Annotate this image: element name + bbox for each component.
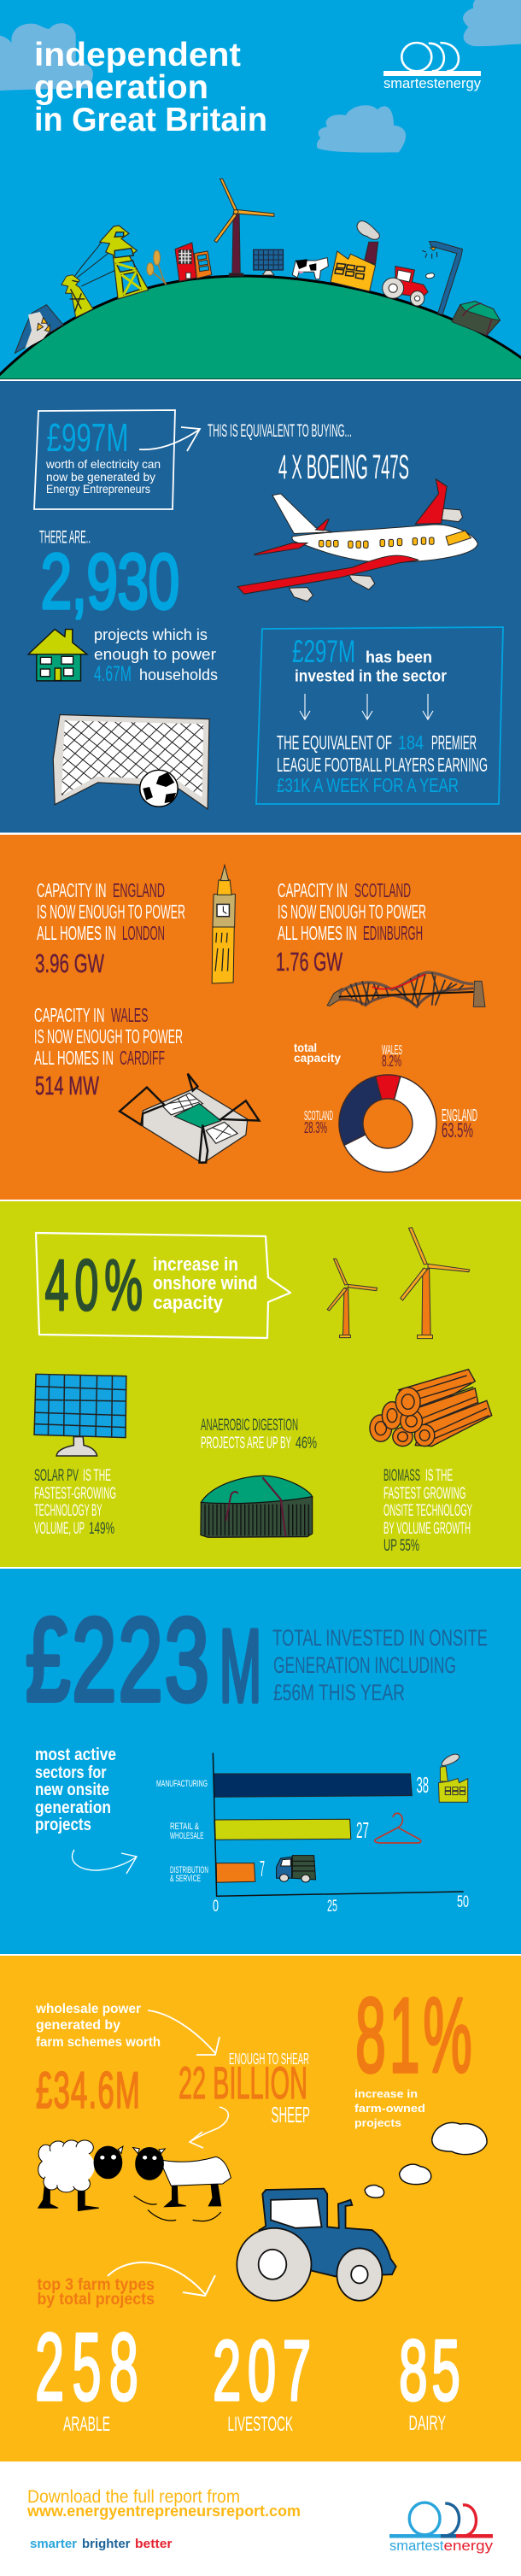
text: solar PV: TECHNOLOGY BY [34,1502,102,1520]
text: England capacity: 3.96 GW [35,948,104,978]
logo: smartestenergy colour [389,2503,494,2554]
stat: arable: ARABLE [63,2413,110,2436]
text: increase farm-owned [354,2087,425,2129]
logo: smartestenergy colour: energy [444,2538,494,2554]
icon: Forth bridge [327,972,485,1006]
text: Scotland capacity: 1.76 GW [276,947,342,977]
text: Scotland capacity: SCOTLAND [354,879,411,901]
donut chart: total capacity: 63.5% [442,1119,473,1142]
icon: coat hanger [375,1813,421,1843]
bar chart: sectors: 7 [260,1856,265,1881]
callout: £997M [34,410,175,509]
callout: £997M: £997M [46,415,128,460]
text: increase farm-owned: increase in [354,2087,418,2100]
icon: street lamp [422,242,462,314]
arrow [190,2107,228,2148]
icon: factory [331,221,379,291]
text: most active sectors: new onsite [35,1781,109,1799]
callout: 40% onshore wind [36,1233,290,1338]
text: Wales capacity: 514 MW [35,1071,99,1100]
donut chart: total capacity: total [294,1041,317,1054]
icon: hydro dam [15,305,63,353]
illustrations on the hill [15,179,500,353]
text: projects: households [139,666,218,684]
callout: £297M: £297M [292,634,355,669]
text: biomass [383,1467,472,1555]
icon: Big Ben [212,866,235,983]
text: solar PV: 149% [89,1520,114,1538]
text: projects: enough to power [94,646,216,663]
panel: Energy Entrepreneurs numbers: THERE ARE.. [39,528,91,547]
icon: wind turbine [214,179,274,276]
panel: technologies [0,1200,521,1568]
bar chart: sectors: RETAIL & [170,1822,199,1832]
text: wholesale power: wholesale power [35,2002,141,2016]
text: wholesale power: farm schemes worth [36,2035,161,2050]
text: biomass: IS THE [425,1467,453,1485]
icon: digester [452,302,500,336]
callout: £297M: 184 [398,731,424,754]
text: most active sectors: most active [35,1746,116,1764]
title: in Great Britain [34,102,267,138]
text: Wales capacity: CAPACITY IN [34,1004,104,1026]
text: Scotland capacity: CAPACITY IN [278,879,348,901]
callout: £997M: now be generated by [46,470,155,484]
text: England capacity: ENGLAND [113,879,165,901]
text: solar PV [34,1467,116,1538]
text: Wales capacity: ALL HOMES IN [34,1047,114,1069]
callout: £297M: PREMIER [431,731,477,754]
bar chart: sectors: DISTRIBUTION [170,1865,208,1875]
text: solar PV: FASTEST-GROWING [34,1485,116,1503]
text: 22 billion sheep: ENOUGH TO SHEAR [229,2051,309,2068]
text: England capacity: LONDON [122,922,165,944]
text: projects: 4.67M [94,662,132,686]
icon: large pylon [100,226,149,299]
panel: hero [0,0,521,380]
donut chart: total capacity: 8.2% [382,1053,401,1070]
stat: livestock: LIVESTOCK [227,2413,293,2436]
text: download: www.energyentrepreneursreport.com [26,2503,301,2520]
callout: £297M: has been [366,649,432,666]
icon: truck [277,1856,316,1882]
donut chart: total capacity: capacity [294,1051,341,1065]
bar chart: sectors: WHOLESALE [170,1831,203,1841]
arrow [139,427,200,451]
icon: wind turbines [327,1228,470,1339]
hill [0,276,521,380]
icon: buildings [175,243,212,281]
text: Wales capacity: CARDIFF [120,1047,165,1069]
callout: 40% onshore wind: 40% [44,1245,143,1325]
icon: solar panel [254,249,283,275]
text: most active sectors: generation [35,1799,111,1817]
arrow [108,2262,215,2296]
bar chart: sectors: 25 [327,1898,337,1916]
text: Scotland capacity: ALL HOMES IN [278,922,357,944]
text: Scotland capacity: EDINBURGH [363,922,423,944]
bar chart: sectors: MANUFACTURING [156,1779,208,1789]
icon: shorn sheep [133,2147,231,2221]
icon: logs [370,1370,492,1446]
callout: £297M: £31K A WEEK FOR A YEAR [277,774,459,796]
clouds [0,0,521,153]
callout: 40% onshore wind: onshore wind [153,1272,258,1294]
panel: Energy Entrepreneurs numbers [0,379,521,834]
text: most active sectors: projects [35,1816,91,1834]
text: 22 billion sheep: 22 BILLION [179,2058,307,2109]
stat: livestock: 207 [213,2323,311,2419]
bar chart: sectors: 50 [457,1893,469,1911]
text: 22 billion sheep: SHEEP [272,2102,310,2127]
text: top 3 farm types [38,2276,155,2309]
logo: smartestenergy colour: smartest [389,2538,444,2554]
arrow [73,1850,137,1874]
text: increase farm-owned: projects [354,2116,401,2129]
text: solar PV: VOLUME, UP [34,1520,85,1538]
icon: red tractor [383,267,434,306]
text: top 3 farm types: top 3 farm types [38,2276,155,2294]
text: most active sectors [35,1746,116,1834]
bar chart: sectors: 27 [356,1817,369,1843]
text: download [26,2487,301,2520]
text: solar PV: IS THE [83,1467,111,1485]
icon: solar panel [34,1374,126,1456]
icon: digester tank [201,1476,313,1537]
panel: capacity by nation [0,832,521,1200]
title [34,37,267,138]
text: Wales capacity: WALES [111,1004,149,1026]
arrow [148,2010,220,2055]
callout: 40% onshore wind: increase in [153,1253,238,1275]
icon: exhaust clouds [365,2122,487,2198]
text: wholesale power: generated by [36,2018,120,2033]
text: total invested: £56M THIS YEAR [273,1680,405,1705]
icon: cow [292,258,328,279]
icon: plane [237,479,477,601]
text: download: Download the full report from [27,2487,240,2507]
text: strapline: better [135,2537,173,2551]
text: England capacity: IS NOW ENOUGH TO POWER [37,901,185,923]
logo: smartestenergy white [383,43,481,91]
text: Wales capacity: IS NOW ENOUGH TO POWER [34,1025,183,1047]
donut chart: total capacity: WALES [382,1043,402,1058]
stat: dairy: DAIRY [408,2412,446,2435]
panel: farms [0,1954,521,2462]
callout: £297M [256,627,503,804]
number: 2,930: 2,930 [41,537,179,625]
text: projects: projects which is [94,626,208,643]
text: strapline [30,2537,173,2551]
panel: onsite generation [0,1567,521,1955]
title: independent [34,37,241,73]
logo: smartestenergy white: smartestenergy [383,75,481,91]
text: wholesale power [35,2002,161,2050]
callout: £997M: Energy Entrepreneurs [46,482,150,496]
text: top 3 farm types: by total projects [38,2291,155,2309]
callout: £297M: invested in the sector [295,668,448,686]
title: generation [34,69,208,106]
text: strapline: brighter [82,2537,131,2551]
text: increase farm-owned: farm-owned [354,2102,425,2115]
bar chart: sectors [156,1753,469,1916]
bar chart: sectors: 38 [417,1772,429,1798]
text: biomass: BIOMASS [383,1467,420,1485]
panel: Energy Entrepreneurs numbers: THIS IS EQUIVALENT TO BUYING... [208,421,352,441]
text: anaerobic digestion: ANAEROBIC DIGESTION [201,1417,298,1435]
panel: onsite generation: M [220,1609,261,1723]
bar chart: sectors: & SERVICE [170,1874,201,1884]
text: Wales capacity [34,1004,183,1100]
icon: blue tractor [237,2189,396,2301]
icon: woolly sheep [38,2140,123,2211]
text: England capacity: CAPACITY IN [37,879,106,901]
text: 22 billion sheep [179,2051,310,2127]
number: £34.6M: £34.6M [36,2063,140,2119]
donut chart: total capacity [294,1041,477,1172]
text: anaerobic digestion: PROJECTS ARE UP BY [201,1435,291,1452]
stat: dairy: 85 [399,2322,460,2419]
icon: small pylon [61,242,114,318]
stat: arable: 258 [35,2315,138,2421]
donut chart: total capacity: SCOTLAND [304,1109,333,1124]
icon: house [28,630,87,681]
callout: £997M: worth of electricity can [45,457,161,471]
donut chart: total capacity: 28.3% [304,1119,327,1136]
icon: small factory [438,1754,468,1802]
text: solar PV: SOLAR PV [34,1467,79,1485]
text: projects [94,626,218,686]
text: total invested [272,1625,488,1705]
text: most active sectors: sectors for [35,1763,107,1782]
callout: £297M: THE EQUIVALENT OF [277,731,392,754]
number: 81%: 81% [355,1976,472,2094]
icon: stadium [120,1074,259,1164]
icon: wheat [147,250,167,285]
number: £223M: £223 [26,1594,209,1726]
text: England capacity [35,879,185,978]
text: strapline: smarter [30,2537,77,2551]
text: biomass: UP 55% [383,1537,419,1555]
text: England capacity: ALL HOMES IN [37,922,116,944]
panel: footer [0,2462,521,2576]
text: anaerobic digestion [201,1417,317,1452]
text: anaerobic digestion: 46% [296,1435,317,1452]
bar chart: sectors: 0 [213,1898,219,1916]
icon: football goal [53,715,209,809]
text: Scotland capacity [276,879,426,977]
callout: 40% onshore wind: capacity [153,1292,224,1313]
